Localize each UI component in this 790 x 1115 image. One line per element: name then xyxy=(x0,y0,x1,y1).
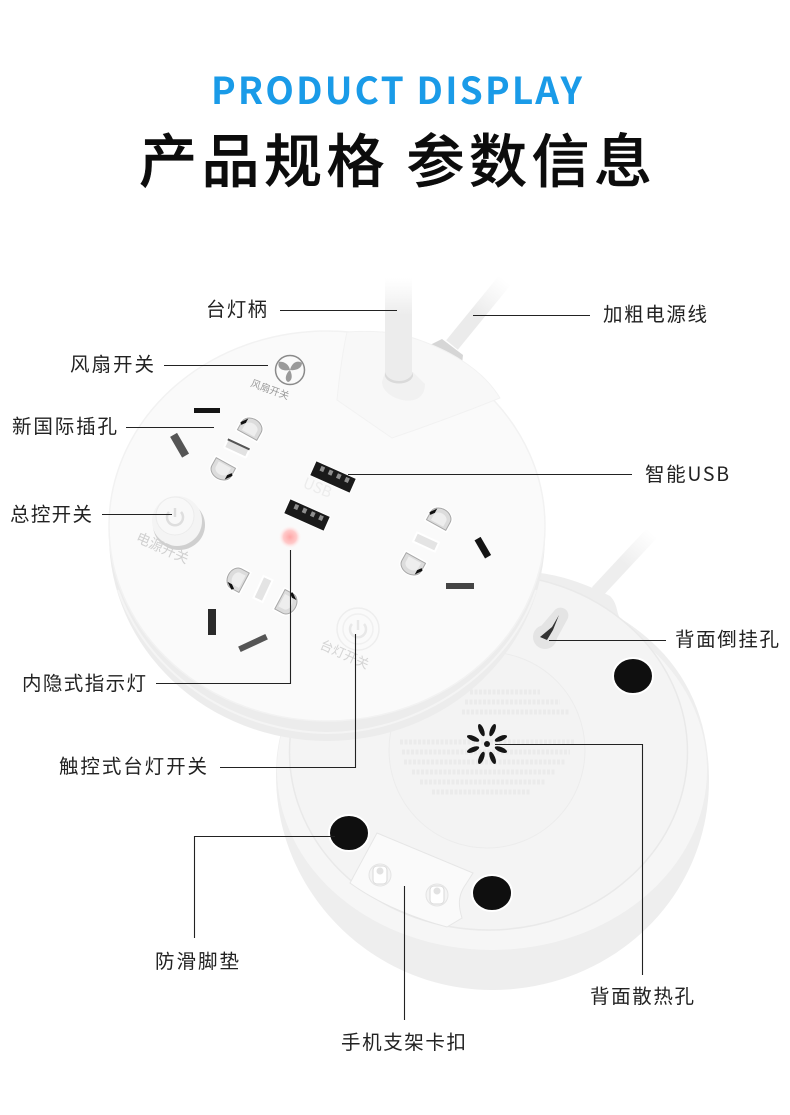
indicator light xyxy=(278,525,302,549)
callout: fan switch: 风扇开关 xyxy=(70,348,154,377)
callout: rear heat vents: 背面散热孔 xyxy=(590,980,694,1009)
back power cord xyxy=(597,533,652,592)
USB ports: USB xyxy=(300,472,335,503)
inner recessed floor xyxy=(290,574,688,930)
icon: fan switch: 风扇开关 xyxy=(249,375,292,402)
icon: heat vents xyxy=(466,723,508,765)
disc side wall xyxy=(109,331,545,741)
master power button xyxy=(133,496,205,568)
back view of the power strip xyxy=(276,533,709,990)
icon: fan switch xyxy=(249,356,304,402)
title: PRODUCT DISPLAY: PRODUCT DISPLAY xyxy=(211,61,583,115)
callout: new international sockets: 新国际插孔 xyxy=(12,410,117,439)
callout: touch lamp switch: 触控式台灯开关 xyxy=(59,750,207,779)
back label circle with embossed text xyxy=(389,652,585,848)
rim ring xyxy=(277,590,707,950)
touch lamp switch xyxy=(317,608,379,673)
socket top left xyxy=(170,408,268,486)
back housing xyxy=(276,573,709,990)
touch lamp switch: 台灯开关 xyxy=(317,634,373,673)
socket bottom xyxy=(208,562,303,652)
callout: hidden indicator light xyxy=(22,550,290,696)
front view of the power strip xyxy=(109,278,545,741)
USB ports xyxy=(284,461,356,531)
callout: phone holder clip: 手机支架卡扣 xyxy=(341,1026,466,1055)
lamp neck mount panel xyxy=(337,331,500,438)
callout: rear heat vents xyxy=(495,744,694,1009)
callout: master switch: 总控开关 xyxy=(10,498,92,527)
phone holder bracket clips xyxy=(350,833,473,927)
heading: 产品规格 参数信息: 产品规格 参数信息 xyxy=(139,115,652,199)
callout: thick power cord: 加粗电源线 xyxy=(603,298,707,327)
callout: rear hanging hole: 背面倒挂孔 xyxy=(675,623,779,652)
icon: keyhole hanging slot xyxy=(533,608,568,649)
callout: lamp stem: 台灯柄 xyxy=(206,293,267,322)
callout: touch lamp switch xyxy=(59,634,356,779)
lamp stem xyxy=(382,278,425,401)
callout: anti-slip pads: 防滑脚垫 xyxy=(155,945,239,974)
socket right xyxy=(395,502,491,589)
callout: hidden indicator light: 内隐式指示灯 xyxy=(22,667,146,696)
power cord with strain relief xyxy=(430,280,505,364)
callout: smart USB: 智能USB xyxy=(645,458,729,487)
callout: anti-slip pads xyxy=(155,836,335,974)
master power button: 电源开关 xyxy=(133,527,192,568)
anti-slip foot pads xyxy=(329,658,653,911)
disc top face xyxy=(109,331,545,721)
